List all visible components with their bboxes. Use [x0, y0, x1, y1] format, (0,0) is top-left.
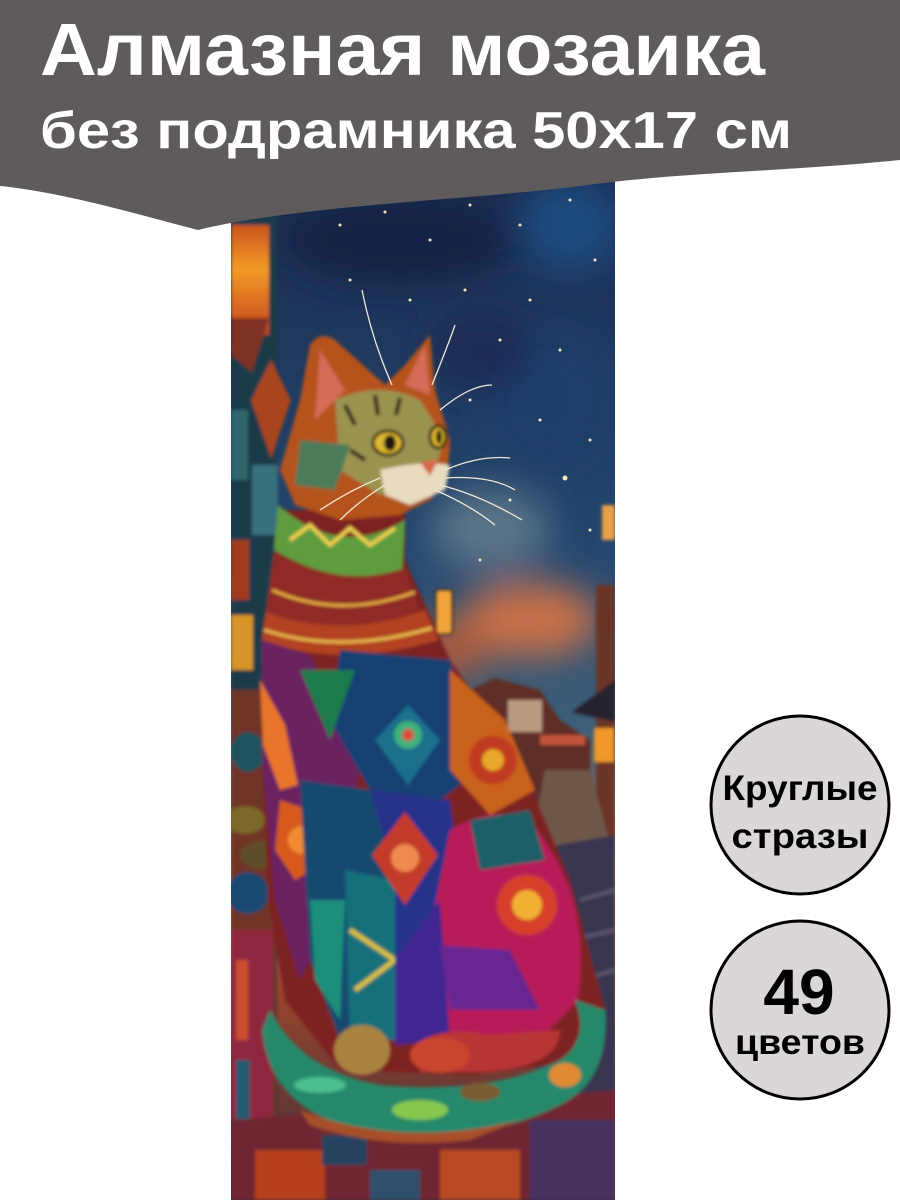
blended painting layer	[225, 170, 620, 1200]
carpet	[231, 1090, 620, 1200]
left wall lanterns and shop	[231, 216, 293, 1122]
cat tail	[262, 1000, 605, 1136]
cat body silhouette	[262, 510, 605, 1075]
street lanterns	[436, 505, 615, 762]
heading line 2: без подрамника 50х17 см	[40, 102, 792, 160]
eyes	[373, 426, 446, 455]
badge: 49 colours	[711, 921, 889, 1099]
cat haunch	[395, 810, 581, 1072]
painting: cat at the night bazaar	[225, 170, 620, 1200]
badge: round rhinestones: Круглые	[722, 769, 878, 808]
badge: round rhinestones	[711, 716, 889, 894]
night sky background	[231, 170, 615, 1200]
distant town	[470, 582, 615, 1094]
cat head	[280, 335, 450, 520]
neck and collar bands	[262, 505, 438, 655]
dark clouds	[280, 180, 620, 680]
heading line 1: Алмазная мозаика	[40, 8, 766, 91]
badge: 49 colours: 49	[763, 956, 835, 1028]
badge: 49 colours: цветов	[735, 1023, 865, 1062]
header banner	[0, 0, 900, 230]
nose	[420, 460, 438, 476]
cat chest patterns	[260, 640, 535, 1040]
whiskers	[320, 290, 522, 525]
badge: round rhinestones: стразы	[732, 817, 868, 856]
stars	[338, 198, 596, 562]
cat front paws	[334, 1025, 470, 1075]
